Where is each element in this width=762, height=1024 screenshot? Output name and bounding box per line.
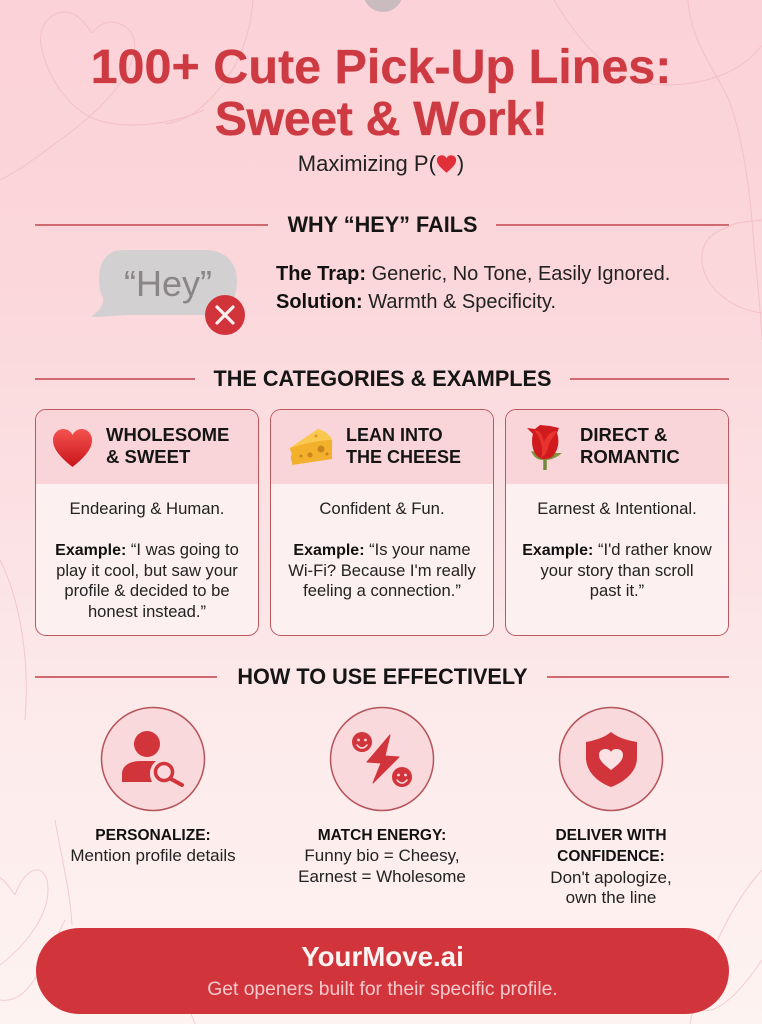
icon: heart emoji	[53, 429, 92, 467]
card example	[288, 540, 476, 600]
title: Sweet & Work!	[215, 92, 547, 146]
tip: match energy: Funny bio = Cheesy,	[304, 846, 460, 865]
card heading: & SWEET	[106, 446, 190, 467]
panel: direct and romantic	[505, 409, 729, 636]
card example: your story than scroll	[540, 561, 694, 580]
text: trap and solution: The Trap: Generic, No Tone, Easily Ignored.	[276, 263, 670, 285]
card example	[55, 540, 239, 621]
heading: how to use effectively: HOW TO USE EFFECTIVELY	[237, 664, 528, 689]
card tagline: Confident & Fun.	[319, 499, 445, 518]
card example: honest instead.”	[88, 602, 206, 621]
card heading: WHOLESOME	[106, 424, 229, 445]
card example: profile & decided to be	[64, 581, 230, 600]
card example: Wi-Fi? Because I'm really	[288, 561, 476, 580]
icon: lightning with smileys	[330, 706, 434, 812]
card heading	[106, 424, 229, 467]
brand name: YourMove.ai	[301, 941, 464, 972]
card example: feeling a connection.”	[303, 581, 461, 600]
card example: past it.”	[590, 581, 644, 600]
card example: play it cool, but saw your	[56, 561, 238, 580]
icon: person with magnifier	[100, 706, 206, 812]
card example: Example: “I'd rather know	[522, 540, 712, 559]
card heading: THE CHEESE	[346, 447, 461, 467]
heading: why hey fails: WHY “HEY” FAILS	[288, 212, 477, 237]
tip: match energy: Earnest = Wholesome	[298, 867, 466, 886]
heading: categories and examples: THE CATEGORIES & EXAMPLES	[214, 366, 551, 391]
card tagline: Endearing & Human.	[70, 499, 224, 518]
icon: grey speech bubble with red x	[91, 250, 245, 335]
card heading	[580, 424, 680, 467]
card heading: DIRECT &	[580, 424, 667, 445]
card example	[522, 540, 712, 600]
top grey circle fragment	[363, 0, 403, 12]
tip: personalize	[70, 827, 236, 865]
tip: personalize: Mention profile details	[70, 846, 236, 865]
title	[91, 40, 671, 146]
card heading: ROMANTIC	[580, 446, 680, 467]
icon: shield with heart	[558, 706, 664, 812]
tip: personalize: PERSONALIZE:	[95, 827, 211, 844]
tip: deliver with confidence: DELIVER WITH	[555, 827, 667, 844]
icon: cheese emoji	[290, 429, 332, 465]
subtitle: Maximizing P( )	[298, 151, 464, 176]
panel: wholesome and sweet	[35, 409, 259, 636]
tip: deliver with confidence: Don't apologize,	[550, 868, 672, 887]
tip: deliver with confidence: CONFIDENCE:	[557, 848, 665, 865]
card heading	[346, 425, 461, 467]
text: trap and solution	[276, 263, 670, 313]
title: 100+ Cute Pick-Up Lines:	[91, 40, 671, 94]
panel: lean into the cheese	[270, 409, 494, 636]
card tagline: Earnest & Intentional.	[537, 499, 697, 518]
tagline: Get openers built for their specific profile.	[207, 979, 558, 1000]
tip: match energy: MATCH ENERGY:	[318, 827, 446, 844]
icon: grey speech bubble with red x: “Hey”	[124, 263, 212, 304]
call to action banner	[36, 928, 729, 1014]
card example: Example: “I was going to	[55, 540, 239, 559]
text: trap and solution: Solution: Warmth & Specificity.	[276, 291, 556, 313]
card example: Example: “Is your name	[293, 540, 471, 559]
icon: rose emoji	[527, 425, 562, 470]
card heading: LEAN INTO	[346, 425, 443, 445]
tip: match energy	[298, 827, 466, 886]
tip: deliver with confidence	[550, 827, 672, 907]
tip: deliver with confidence: own the line	[566, 888, 656, 907]
